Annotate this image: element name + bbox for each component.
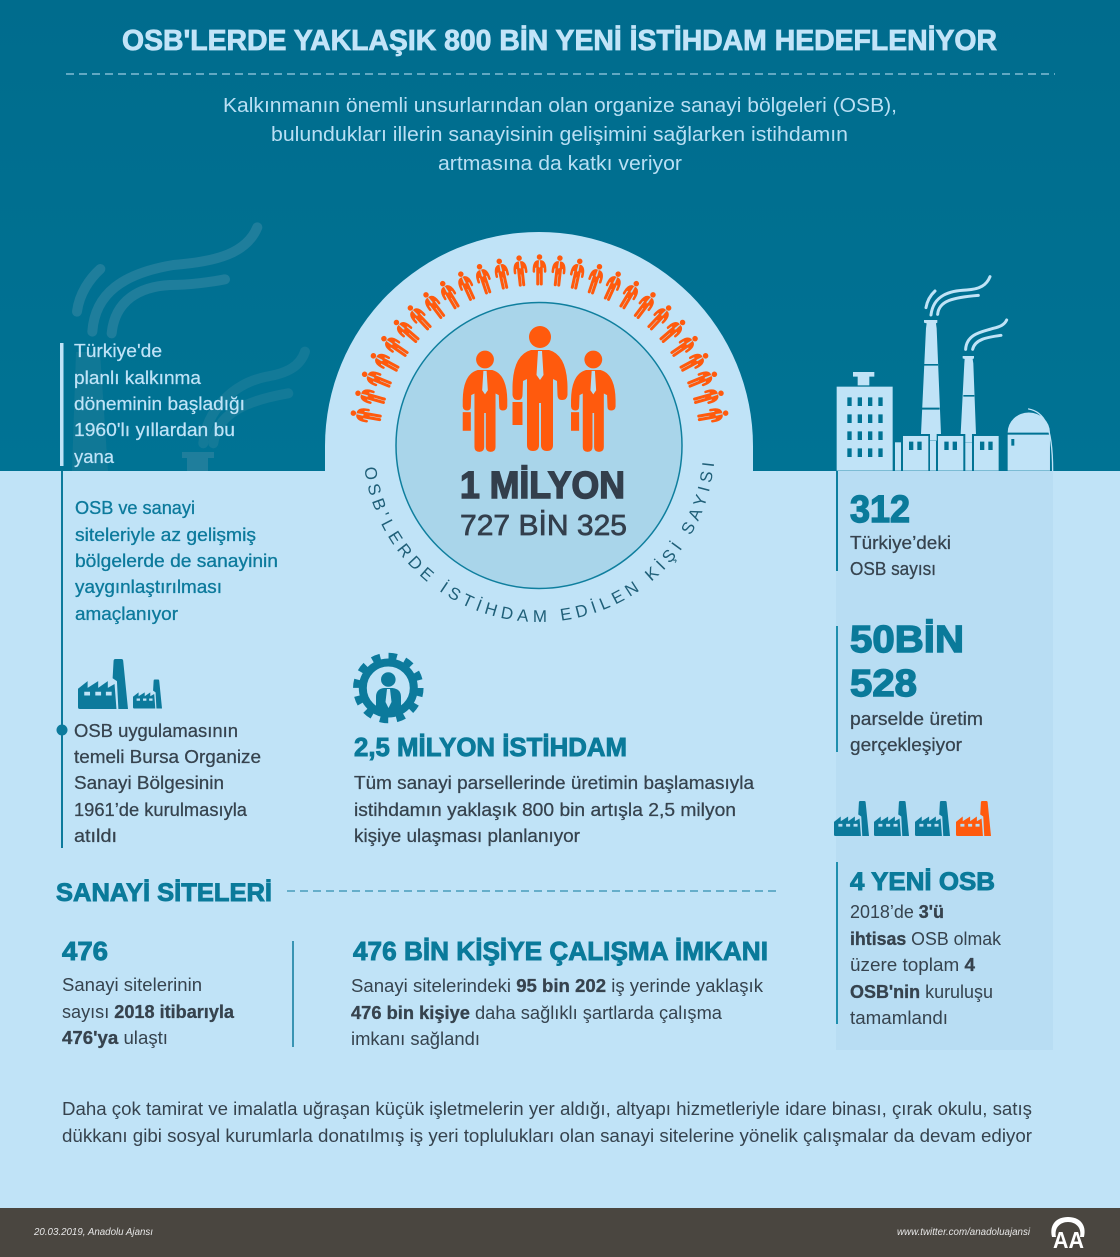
intro text: Kalkınmanın önemli unsurlarından olan organize sanayi bölgeleri (OSB), <box>223 95 897 117</box>
left text: Bursa OSB <box>74 721 261 846</box>
faded smoke and chimneys decoration <box>72 227 305 471</box>
intro text: artmasına da katkı veriyor <box>438 153 682 175</box>
left text: Bursa OSB: Sanayi Bölgesinin <box>74 773 224 793</box>
left text: 1960s: döneminin başladığı <box>74 394 245 414</box>
stat: 476 sites: 476'ya ulaştı <box>62 1028 168 1048</box>
left text: goal: OSB ve sanayi <box>75 498 195 518</box>
main number: 1 MİLYON <box>460 465 625 507</box>
left text: goal: amaçlanıyor <box>75 604 178 624</box>
text: 2.5 million jobs: Tüm sanayi parsellerinde üretimin başlamasıyla <box>354 773 755 793</box>
stat: 50 bin 528 parcels: 50BİN <box>850 619 964 661</box>
stat: 476 sites: sayısı 2018 itibarıyla <box>62 1002 235 1022</box>
stat: 50 bin 528 parcels: gerçekleşiyor <box>850 735 962 755</box>
left text: 1960s: yana <box>74 447 115 467</box>
icon: two factories <box>78 659 162 709</box>
left text: 1960s <box>60 341 245 467</box>
left text: goal: siteleriyle az gelişmiş <box>75 525 256 545</box>
stat: 312 OSB: OSB sayısı <box>850 559 936 579</box>
stat: 4 new OSB: ihtisas OSB olmak <box>850 929 1002 949</box>
stat: 4 new OSB: 2018’de 3'ü <box>850 902 944 922</box>
icon: Anadolu Agency logo <box>1051 1217 1085 1253</box>
stat: 50 bin 528 parcels: parselde üretim <box>850 709 983 729</box>
stat: 4 new OSB: 4 YENİ OSB <box>850 868 995 896</box>
intro text <box>223 95 897 175</box>
text: 2.5 million jobs <box>354 773 755 846</box>
left text: 1960s: Türkiye'de <box>74 341 162 361</box>
timeline line <box>56 471 68 848</box>
stat: 4 new OSB <box>837 862 1002 1028</box>
main number <box>460 465 627 542</box>
stat: 312 OSB <box>837 471 951 579</box>
bottom note <box>62 1099 1032 1146</box>
stat: 4 new OSB: üzere toplam 4 <box>850 955 975 975</box>
title: OSB'LERDE YAKLAŞIK 800 BİN YENİ İSTİHDAM HEDEFLENİYOR <box>122 25 997 57</box>
heading: 2.5 million jobs: 2,5 MİLYON İSTİHDAM <box>354 732 627 762</box>
main number: 727 BİN 325 <box>460 509 627 542</box>
left text: goal <box>75 498 278 624</box>
bottom note: dükkanı gibi sosyal kurumlarla donatılmış iş yeri toplulukları olan sanayi sitelerine yönelik çalışmalar da devam ediyor <box>62 1126 1032 1146</box>
left text: Bursa OSB: OSB uygulamasının <box>74 721 238 741</box>
left text: 1960s: 1960'lı yıllardan bu <box>74 420 235 440</box>
stat: 50 bin 528 parcels: 528 <box>850 663 917 705</box>
icon: four factories <box>834 801 991 836</box>
left text: Bursa OSB: 1961’de kurulmasıyla <box>74 800 248 820</box>
text: 2.5 million jobs: istihdamın yaklaşık 800 bin artışla 2,5 milyon <box>354 800 736 820</box>
bottom note: Daha çok tamirat ve imalatla uğraşan küçük işletmelerin yer aldığı, altyapı hizmetleriyle idare binası, çırak okulu, satış <box>62 1099 1032 1119</box>
left text: Bursa OSB: temeli Bursa Organize <box>74 747 261 767</box>
stat: 476 sites: 476 <box>62 936 108 966</box>
left text: goal: bölgelerde de sanayinin <box>75 551 278 571</box>
three large people icons with briefcases <box>463 326 616 452</box>
stat: 312 OSB: Türkiye’deki <box>850 533 951 553</box>
icon: gear with person <box>356 656 420 720</box>
stat: 476 sites: Sanayi sitelerinin <box>62 975 202 995</box>
left text: 1960s: planlı kalkınma <box>74 368 202 388</box>
stat: 476 sites <box>62 936 235 1048</box>
intro text: bulundukları illerin sanayisinin gelişimini sağlarken istihdamın <box>271 124 848 146</box>
text: 2.5 million jobs: kişiye ulaşması planlanıyor <box>354 826 580 846</box>
left text: Bursa OSB: atıldı <box>74 826 117 846</box>
heading: Sanayi Siteleri: SANAYİ SİTELERİ <box>56 879 272 907</box>
footer: 20.03.2019, Anadolu Ajansı <box>33 1227 153 1238</box>
arc of small people icons <box>349 254 730 425</box>
stat: 476 thousand people: imkanı sağlandı <box>351 1029 480 1049</box>
left text: goal: yaygınlaştırılması <box>75 577 222 597</box>
footer <box>0 1208 1120 1257</box>
stat: 476 thousand people: 476 BİN KİŞİYE ÇALIŞMA İMKANI <box>353 936 768 966</box>
outer semicircle <box>325 232 753 471</box>
factory skyline illustration <box>837 277 1053 471</box>
icon: Anadolu Agency logo: AA <box>1053 1227 1084 1253</box>
curved caption: OSB'LERDE İSTİHDAM EDİLEN KİŞİ SAYISI <box>365 463 714 622</box>
stat: 476 thousand people <box>351 936 768 1049</box>
stat: 476 thousand people: Sanayi sitelerindeki 95 bin 202 iş yerinde yaklaşık <box>351 976 764 996</box>
inner circle <box>396 302 682 588</box>
stat: 50 bin 528 parcels <box>837 619 983 755</box>
footer: www.twitter.com/anadoluajansi <box>897 1227 1031 1238</box>
stat: 312 OSB: 312 <box>850 489 910 531</box>
stat: 476 thousand people: 476 bin kişiye daha sağlıklı şartlarda çalışma <box>351 1003 723 1023</box>
stat: 4 new OSB: OSB'nin kuruluşu <box>850 982 993 1002</box>
background: dark teal header area <box>0 0 1120 471</box>
stat: 4 new OSB: tamamlandı <box>850 1008 948 1028</box>
panel: right statistics background <box>836 471 1053 1050</box>
